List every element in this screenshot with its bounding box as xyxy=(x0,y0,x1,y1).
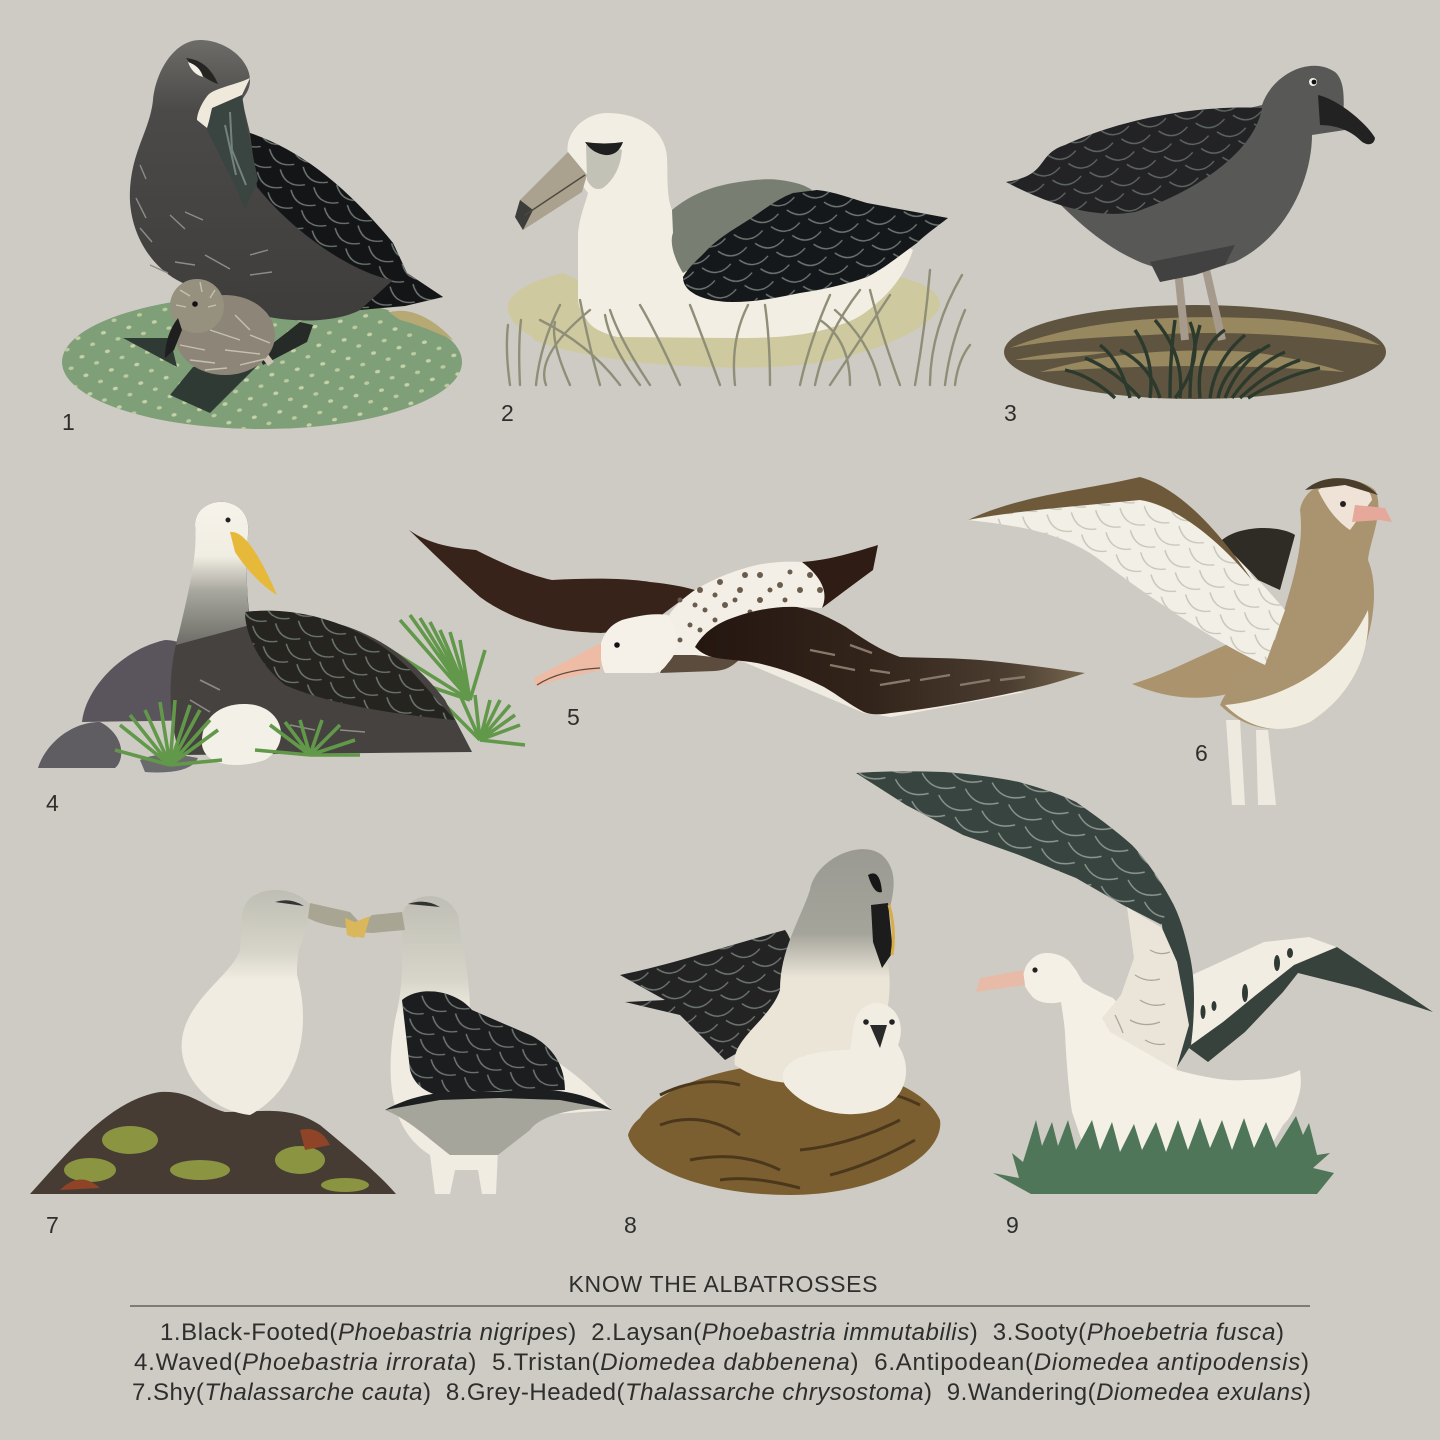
far wing xyxy=(1191,937,1339,1045)
body and head xyxy=(567,113,913,338)
far wing xyxy=(409,530,695,633)
back fern leaves xyxy=(380,615,525,745)
left bird xyxy=(182,890,310,1115)
number 2: 2 xyxy=(501,400,514,426)
mossy rock xyxy=(30,1092,396,1194)
raised wing underside xyxy=(1102,907,1189,1070)
bill xyxy=(207,95,258,210)
body and head xyxy=(1023,953,1301,1165)
grey shoulder xyxy=(672,179,812,273)
head xyxy=(601,614,677,673)
raised wing top xyxy=(856,771,1194,1067)
grass xyxy=(993,1116,1334,1194)
feet and leg xyxy=(123,338,260,413)
wing xyxy=(245,611,455,720)
legend line 2: 4.Waved(Phoebastria irrorata) 5.Tristan(Diomedea dabbenena) 6.Antipodean(Diomedea antipodensis) xyxy=(134,1349,1309,1376)
legs xyxy=(1178,265,1222,340)
bird 9: wandering albatross with raised wings xyxy=(856,771,1433,1194)
earth mound xyxy=(1004,305,1386,399)
rocks xyxy=(82,640,215,722)
near wing xyxy=(739,660,1025,717)
number 6: 6 xyxy=(1195,740,1208,766)
number 5: 5 xyxy=(567,704,580,730)
legend line 3: 7.Shy(Thalassarche cauta) 8.Grey-Headed(Thalassarche chrysostoma) 9.Wandering(Diomedea exulans) xyxy=(132,1379,1311,1406)
chick xyxy=(175,295,275,375)
bird 7: shy albatross pair on rock xyxy=(30,890,612,1194)
egg xyxy=(202,704,281,765)
body and head xyxy=(735,849,894,1083)
bird 6: antipodean albatross xyxy=(968,477,1392,805)
right bird xyxy=(391,896,612,1194)
number 1: 1 xyxy=(62,409,75,435)
tail wing xyxy=(1132,630,1285,698)
bird 2: laysan albatross on nest xyxy=(507,113,970,385)
body xyxy=(1220,480,1378,729)
wing xyxy=(1006,107,1262,214)
bird 8: grey-headed albatross on nest with chick xyxy=(620,849,940,1195)
bird 3: sooty albatross xyxy=(1004,66,1386,399)
bill xyxy=(515,152,587,230)
bird 1: black-footed albatross with chick xyxy=(62,40,462,429)
wing xyxy=(620,930,794,1060)
front ferns xyxy=(115,700,360,765)
bill xyxy=(230,532,277,595)
beak xyxy=(534,643,601,687)
body xyxy=(130,40,443,321)
number 9: 9 xyxy=(1006,1212,1019,1238)
eye xyxy=(186,58,218,84)
body with neck xyxy=(171,502,472,755)
legend title: KNOW THE ALBATROSSES xyxy=(568,1271,878,1297)
bill xyxy=(1318,95,1375,144)
number 3: 3 xyxy=(1004,400,1017,426)
bill xyxy=(871,903,893,968)
bird 4: waved albatross on egg xyxy=(38,502,525,772)
body xyxy=(1036,66,1345,271)
black wing xyxy=(683,190,948,302)
legend line 1: 1.Black-Footed(Phoebastria nigripes) 2.Laysan(Phoebastria immutabilis) 3.Sooty(Phoebetria fusca) xyxy=(160,1319,1284,1346)
legs xyxy=(1226,720,1276,805)
chick xyxy=(783,1003,906,1114)
white face patch xyxy=(197,78,250,128)
head xyxy=(1318,483,1372,530)
number 4: 4 xyxy=(46,790,59,816)
nest patch xyxy=(508,273,940,368)
nest xyxy=(628,1064,940,1195)
grass xyxy=(507,270,970,385)
beak xyxy=(976,970,1025,992)
wing xyxy=(250,133,443,310)
raised wing xyxy=(968,477,1285,665)
number 8: 8 xyxy=(624,1212,637,1238)
green ground xyxy=(62,295,462,429)
grass xyxy=(1065,320,1320,398)
number 7: 7 xyxy=(46,1212,59,1238)
bird 5: tristan albatross in flight xyxy=(409,530,1085,717)
back wing xyxy=(1222,528,1295,590)
face shading xyxy=(586,144,622,189)
eye xyxy=(585,142,623,155)
back and spots xyxy=(659,545,878,673)
